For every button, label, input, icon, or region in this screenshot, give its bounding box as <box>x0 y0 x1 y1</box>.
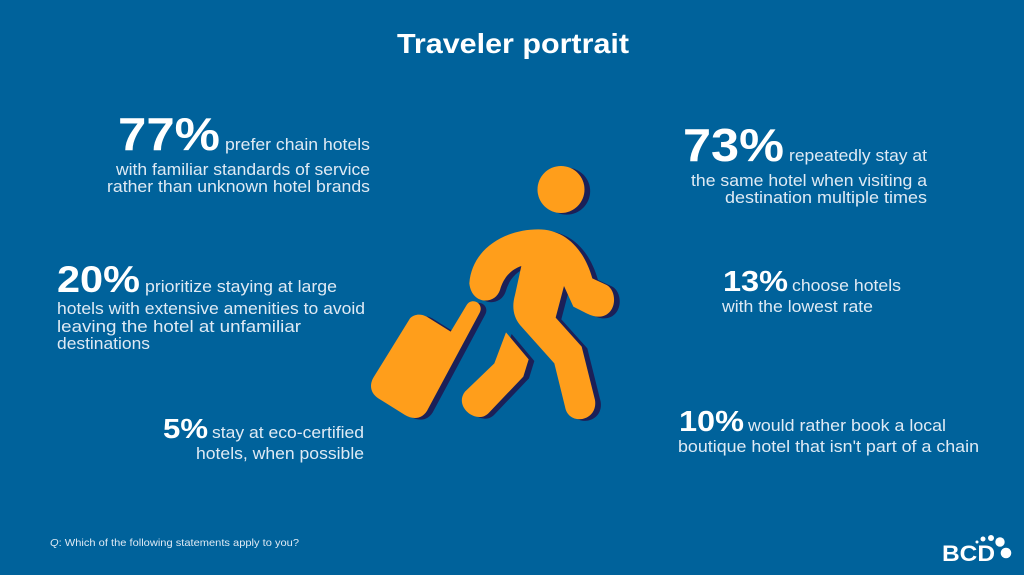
stat: 13% lowest rate: choose hotels <box>792 276 901 295</box>
stat: 10% local boutique hotel: 10% <box>679 406 744 438</box>
stat: 77% prefer chain hotels: with familiar standards of service <box>115 160 370 179</box>
stat: 10% local boutique hotel: boutique hotel that isn't part of a chain <box>678 437 979 456</box>
stat: 20% prioritize large hotels: destinations <box>57 334 150 353</box>
footnote: Q: Which of the following statements apply to you? <box>50 537 299 549</box>
stat: 5% eco-certified hotels: stay at eco-certified <box>212 423 364 442</box>
stat: 20% prioritize large hotels: prioritize staying at large <box>145 277 337 296</box>
stat: 5% eco-certified hotels: 5% <box>163 413 208 444</box>
stat: 13% lowest rate: 13% <box>723 266 788 298</box>
stat: 10% local boutique hotel: would rather book a local <box>747 416 946 435</box>
stat: 73% repeatedly stay: destination multiple times <box>725 188 927 207</box>
stat: 77% prefer chain hotels: 77% <box>118 108 220 160</box>
stat: 77% prefer chain hotels: prefer chain hotels <box>225 135 370 154</box>
stat: 73% repeatedly stay: repeatedly stay at <box>789 146 927 165</box>
stat: 73% repeatedly stay <box>683 119 928 207</box>
logo: BCD <box>942 535 1011 566</box>
stat: 20% prioritize large hotels: hotels with extensive amenities to avoid <box>57 299 365 318</box>
icon: traveler with suitcase <box>371 166 620 421</box>
stat: 20% prioritize large hotels <box>57 259 365 353</box>
stat: 5% eco-certified hotels: hotels, when possible <box>196 444 364 463</box>
stat: 10% local boutique hotel <box>678 406 979 456</box>
stat: 5% eco-certified hotels <box>163 413 364 463</box>
stat: 20% prioritize large hotels: 20% <box>57 259 140 300</box>
stat: 77% prefer chain hotels <box>107 108 370 196</box>
stat: 20% prioritize large hotels: leaving the hotel at unfamiliar <box>57 317 301 336</box>
stat: 73% repeatedly stay: 73% <box>683 119 784 171</box>
stat: 13% lowest rate <box>721 266 901 316</box>
logo: BCD: BCD <box>942 541 995 566</box>
title: Traveler portrait <box>397 28 629 59</box>
stat: 77% prefer chain hotels: rather than unknown hotel brands <box>107 177 370 196</box>
stat: 73% repeatedly stay: the same hotel when visiting a <box>691 171 928 190</box>
stat: 13% lowest rate: with the lowest rate <box>721 297 873 316</box>
